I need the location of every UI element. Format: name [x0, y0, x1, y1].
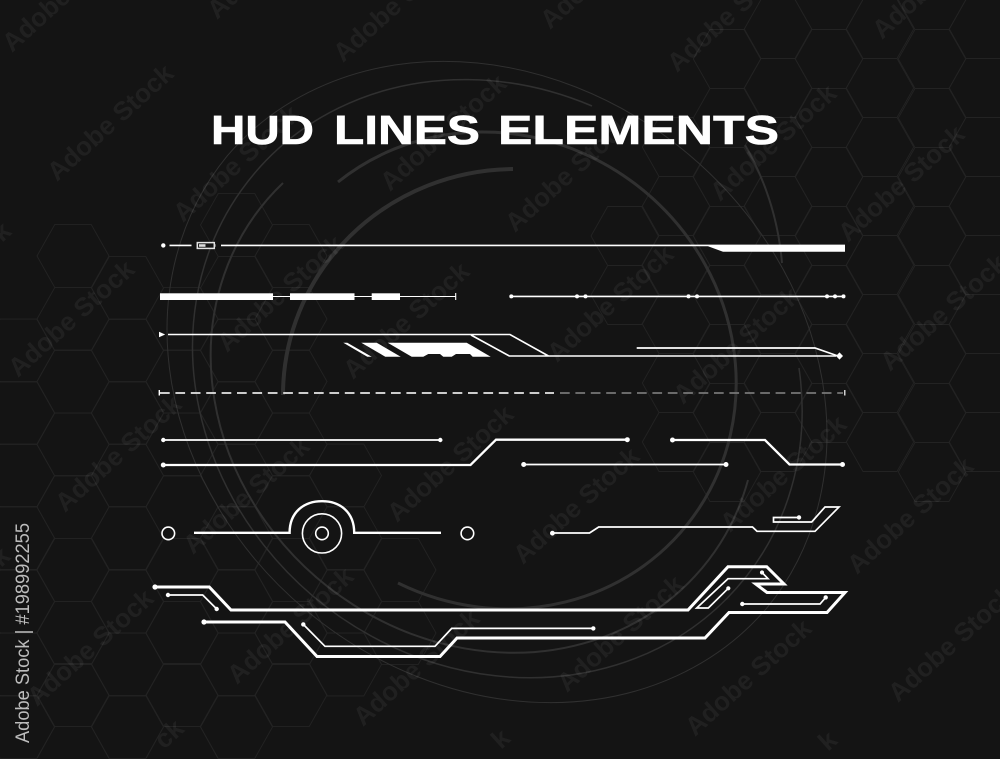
row 4: dashed line fading to grey	[159, 390, 845, 396]
watermark pattern: Adobe Stock	[499, 108, 638, 237]
watermark pattern: Adobe Stock	[714, 408, 853, 537]
row 2 right: dotted node line	[509, 294, 846, 298]
watermark pattern: Adobe Stock	[679, 612, 818, 741]
hexagon grid: right cluster	[591, 0, 1000, 502]
watermark pattern: Adobe Stock	[221, 560, 360, 689]
row 3: angled line with stripes and diamond	[159, 332, 843, 360]
title: LINES	[334, 107, 480, 153]
title	[211, 107, 779, 153]
row 6 left: circular target element	[162, 501, 474, 553]
watermark pattern: Adobe Stock	[177, 430, 316, 559]
title: HUD	[211, 107, 314, 153]
side stock id text: Adobe Stock | #198992255	[13, 523, 34, 743]
watermark pattern: Adobe Stock	[541, 238, 680, 367]
watermark pattern: ck	[148, 712, 190, 754]
concentric radar rings	[167, 61, 827, 703]
stripes	[343, 343, 491, 357]
watermark pattern: Adobe Stock	[841, 450, 980, 579]
row 5: straight and stepped lines	[161, 437, 845, 468]
watermark pattern: Adobe Stock	[667, 280, 806, 409]
row 2 left: segmented bar line	[160, 293, 456, 300]
hexagon grid: left cluster	[0, 194, 436, 759]
watermark pattern: Adobe Stock	[347, 602, 486, 731]
watermark pattern: Adobe Stock	[551, 568, 690, 697]
row 1: line with battery icon and thick end	[161, 243, 845, 252]
watermark pattern: Adobe Stock	[507, 440, 646, 569]
watermark pattern: Adobe Stock	[41, 57, 180, 186]
watermark pattern: Adobe Stock	[337, 255, 476, 384]
row 7: circuit trace cluster	[152, 567, 845, 656]
icon: battery	[197, 243, 216, 248]
watermark pattern: Adobe Stock	[21, 582, 160, 711]
watermark pattern: Adobe Stock	[832, 118, 971, 247]
watermark pattern: Adobe Stock	[381, 398, 520, 527]
watermark pattern: k	[485, 722, 516, 754]
title: ELEMENTS	[498, 107, 779, 153]
watermark pattern: k	[812, 724, 843, 756]
watermark pattern: Adobe Stock	[704, 77, 843, 206]
watermark pattern: Adobe Stock	[374, 67, 513, 196]
watermark pattern: Adobe Stock	[49, 388, 188, 517]
watermark pattern: Adobe Stock	[167, 98, 306, 227]
watermark pattern: Adobe Stock	[211, 228, 350, 357]
watermark pattern: Adobe Stock	[2, 253, 141, 382]
row 6 right: hooked circuit line	[550, 507, 839, 536]
